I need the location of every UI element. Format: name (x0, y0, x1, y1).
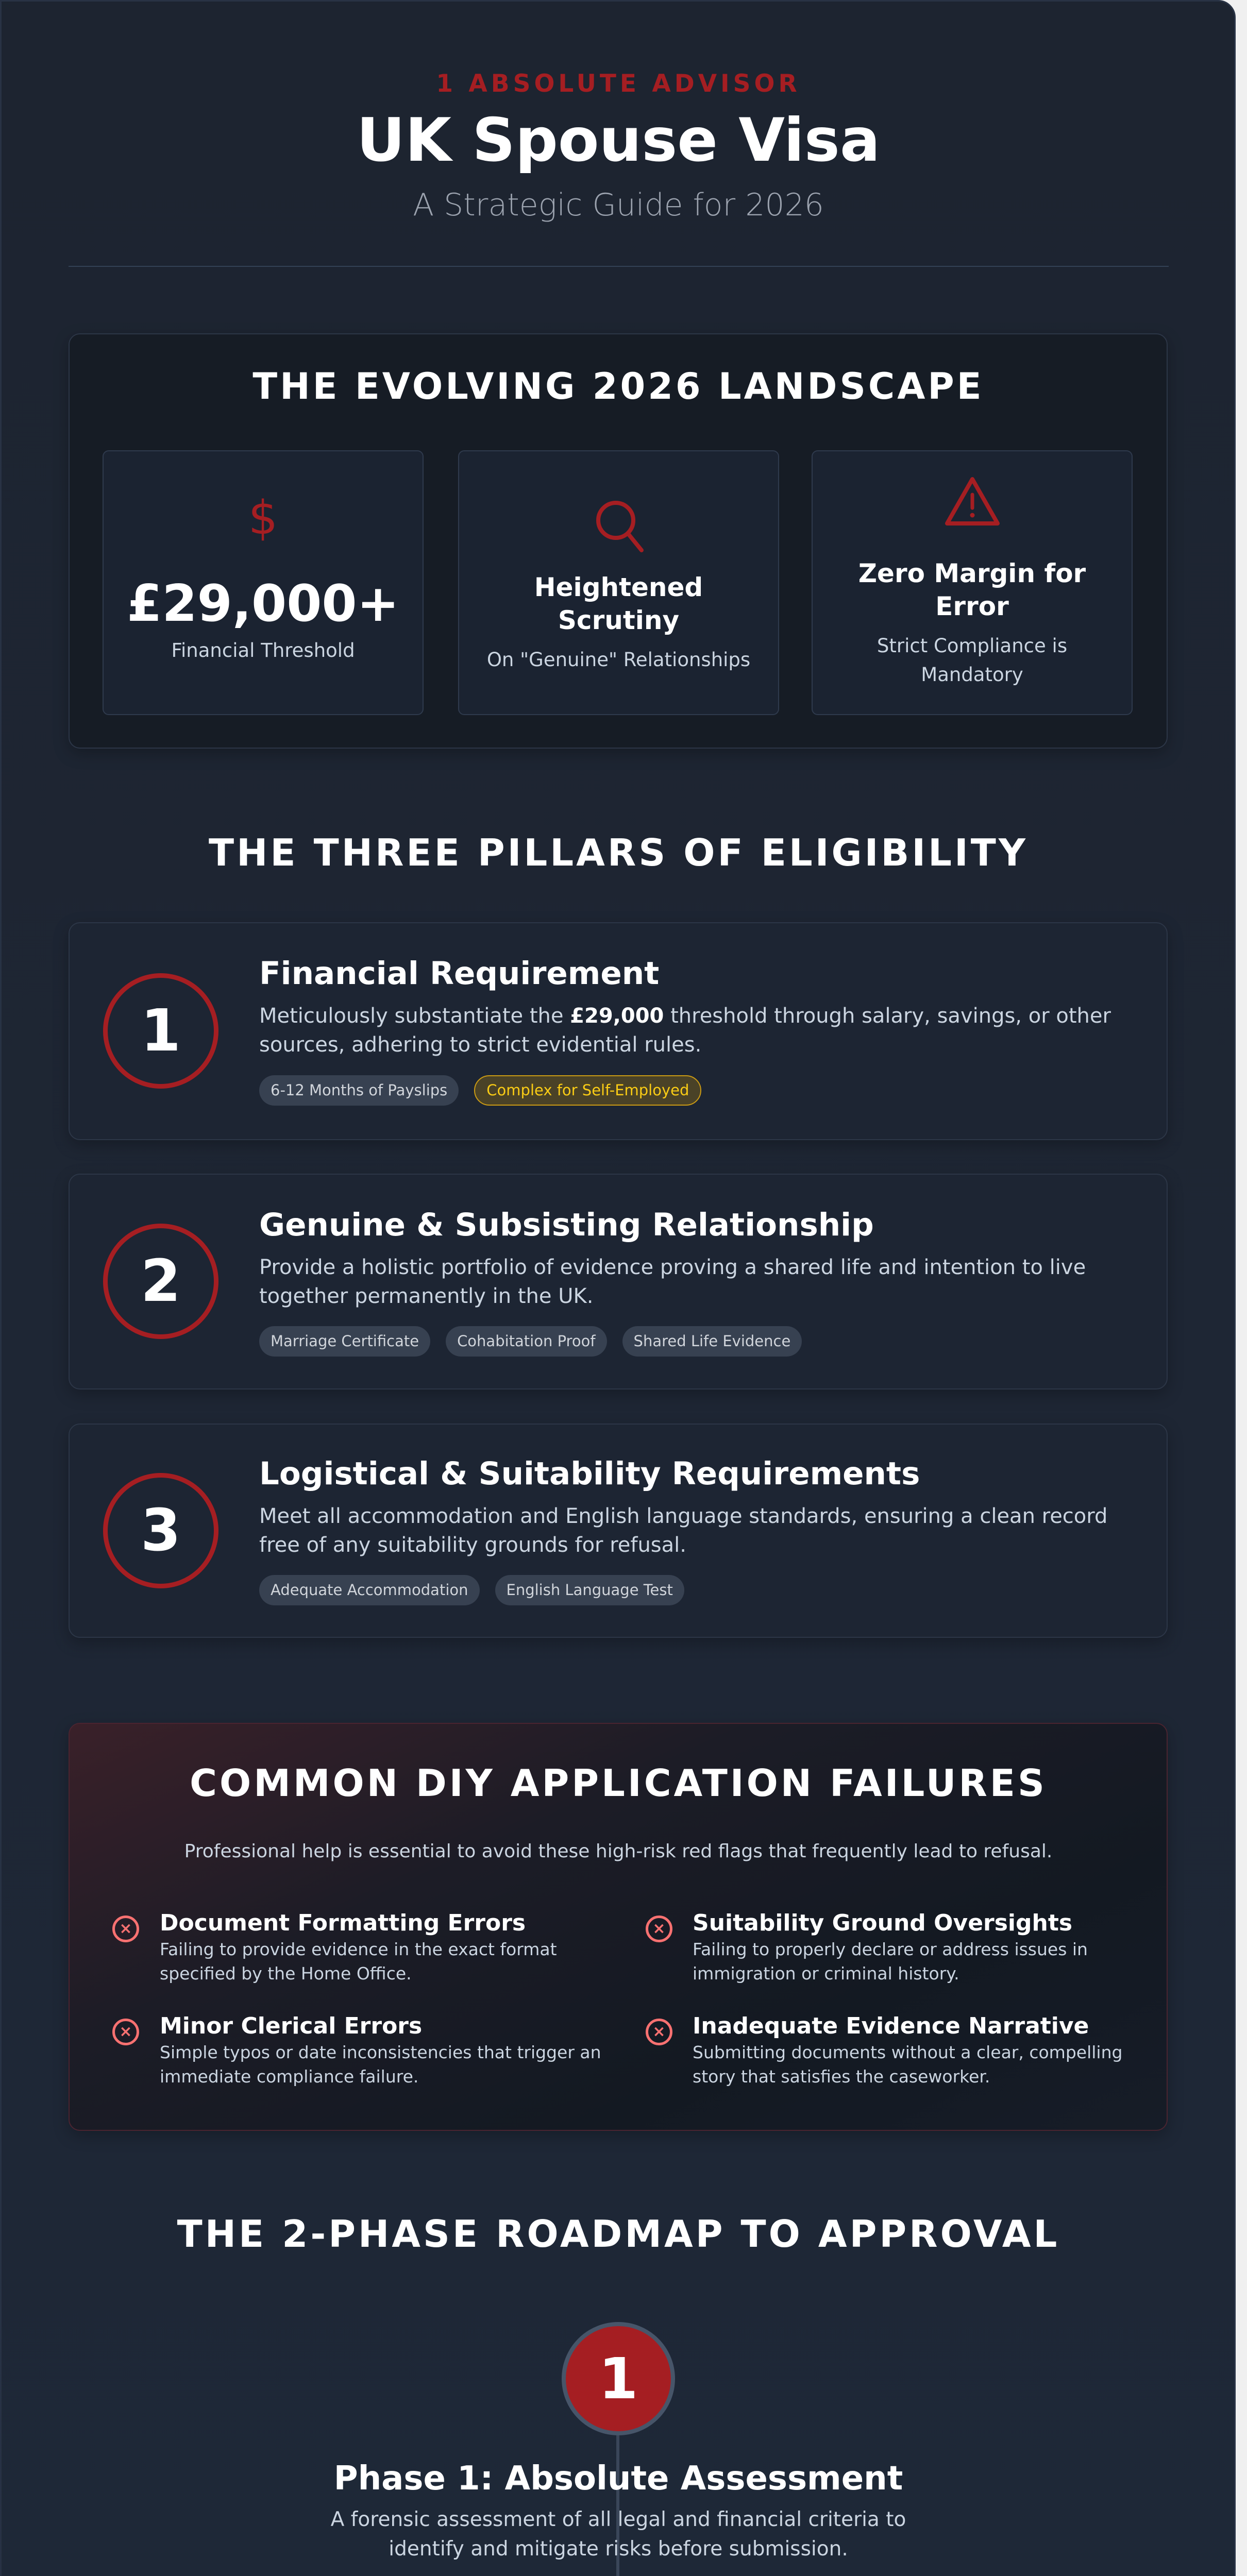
icon: x: × (119, 1920, 132, 1938)
icon: x: × (652, 2023, 666, 2041)
subtitle: A Strategic Guide for 2026 (413, 187, 824, 223)
pillar 2 number: 2 (141, 1248, 181, 1315)
pillar 2 tags: Marriage Certificate (271, 1332, 419, 1350)
pillar 3 title: Logistical & Suitability Requirements (259, 1455, 920, 1492)
phase 1 circle: 1 (599, 2346, 638, 2412)
stat label: Financial Threshold (171, 639, 355, 662)
failure 4 (646, 2013, 1122, 2087)
icon: x (646, 1916, 672, 1942)
card: scrutiny (458, 450, 779, 715)
brand label: 1 ABSOLUTE ADVISOR (436, 70, 801, 98)
pillar 2 tags (259, 1326, 802, 1357)
card title (858, 558, 1086, 621)
pillar 1 text: Meticulously substantiate the £29,000 threshold through salary, savings, or other sources, adhering to strict evidential rules. (259, 1004, 1111, 1057)
failure 2: Failing to properly declare or address issues in immigration or criminal history. (693, 1939, 1088, 1984)
failure 4: Submitting documents without a clear, compelling story that satisfies the caseworker. (693, 2042, 1122, 2087)
card title (534, 572, 703, 635)
phase 1 title: Phase 1: Absolute Assessment (334, 2460, 903, 2498)
pillar 3 (69, 1423, 1168, 1638)
failure 1: Failing to provide evidence in the exact format specified by the Home Office. (160, 1939, 557, 1984)
phase 1 circle (562, 2322, 675, 2435)
pillar 2 text: Provide a holistic portfolio of evidence proving a shared life and intention to live together permanently in the UK. (259, 1256, 1086, 1308)
card: financial threshold (103, 450, 424, 715)
card text (877, 635, 1067, 686)
pillar 3 number (103, 1473, 218, 1588)
icon: x (112, 1916, 139, 1942)
pillar 3 tags: Adequate Accommodation (271, 1581, 468, 1599)
failure 2: Suitability Ground Oversights (693, 1910, 1072, 1936)
failure 4: Inadequate Evidence Narrative (693, 2013, 1089, 2039)
card text: Strict Compliance is (877, 635, 1067, 657)
pillar 1 number (103, 973, 218, 1089)
pillar 1 tags: Complex for Self-Employed (486, 1081, 689, 1099)
card text: On "Genuine" Relationships (487, 649, 750, 671)
failure 3: Minor Clerical Errors (160, 2013, 422, 2039)
phase 1 text: identify and mitigate risks before submission. (389, 2537, 848, 2561)
heading: pillars: THE THREE PILLARS OF ELIGIBILITY (209, 831, 1028, 874)
pillar 1 tags: 6-12 Months of Payslips (271, 1081, 447, 1099)
card: zero margin (812, 450, 1133, 715)
icon: x: × (119, 2023, 132, 2041)
icon: x (112, 2019, 139, 2045)
failures heading: COMMON DIY APPLICATION FAILURES (190, 1761, 1047, 1805)
pillar 1 title: Financial Requirement (259, 955, 659, 992)
card text: Mandatory (921, 664, 1023, 686)
failure 2 (646, 1910, 1088, 1984)
pillar 1 number: 1 (141, 997, 181, 1064)
pillar 3 text: Meet all accommodation and English language standards, ensuring a clean record free of any suitability grounds for refusal. (259, 1504, 1107, 1557)
pillar 2 number (103, 1224, 218, 1339)
icon: magnifier (596, 501, 644, 552)
pillar 2 tags: Shared Life Evidence (634, 1332, 790, 1350)
landscape heading: THE EVOLVING 2026 LANDSCAPE (252, 365, 984, 408)
pillar 3 tags (259, 1575, 684, 1605)
timeline line (616, 2421, 619, 2576)
pillar 2 tags: Cohabitation Proof (457, 1332, 596, 1350)
failure 1: Document Formatting Errors (160, 1910, 526, 1936)
heading: roadmap: THE 2-PHASE ROADMAP TO APPROVAL (177, 2212, 1059, 2256)
failures intro: Professional help is essential to avoid these high-risk red flags that frequently lead to refusal. (184, 1841, 1052, 1862)
pillar 1 tags (259, 1075, 701, 1106)
failure 3 (112, 2013, 601, 2087)
card title: Error (935, 591, 1009, 621)
icon: x: × (652, 1920, 666, 1938)
failure 3: Simple typos or date inconsistencies that trigger an immediate compliance failure. (160, 2042, 601, 2087)
pillar 2 title: Genuine & Subsisting Relationship (259, 1207, 874, 1243)
icon: warning (945, 477, 1000, 526)
icon: x (646, 2019, 672, 2045)
card title: Scrutiny (558, 605, 679, 635)
stat: £29,000+ (127, 574, 399, 633)
pillar 3 number: 3 (141, 1497, 181, 1564)
failure 1 (112, 1910, 557, 1984)
panel: failures (69, 1723, 1168, 2131)
pillar 2 (69, 1174, 1168, 1389)
phase 1 text: A forensic assessment of all legal and financial criteria to (331, 2508, 906, 2531)
pillar 3 tags: English Language Test (506, 1581, 673, 1599)
pillar 1 (69, 922, 1168, 1140)
card title: Heightened (534, 572, 703, 602)
panel: landscape (69, 333, 1168, 749)
card title: Zero Margin for (858, 558, 1086, 588)
phase 1 text (331, 2508, 906, 2561)
icon: money: $ (248, 491, 278, 545)
title: UK Spouse Visa (357, 106, 880, 175)
